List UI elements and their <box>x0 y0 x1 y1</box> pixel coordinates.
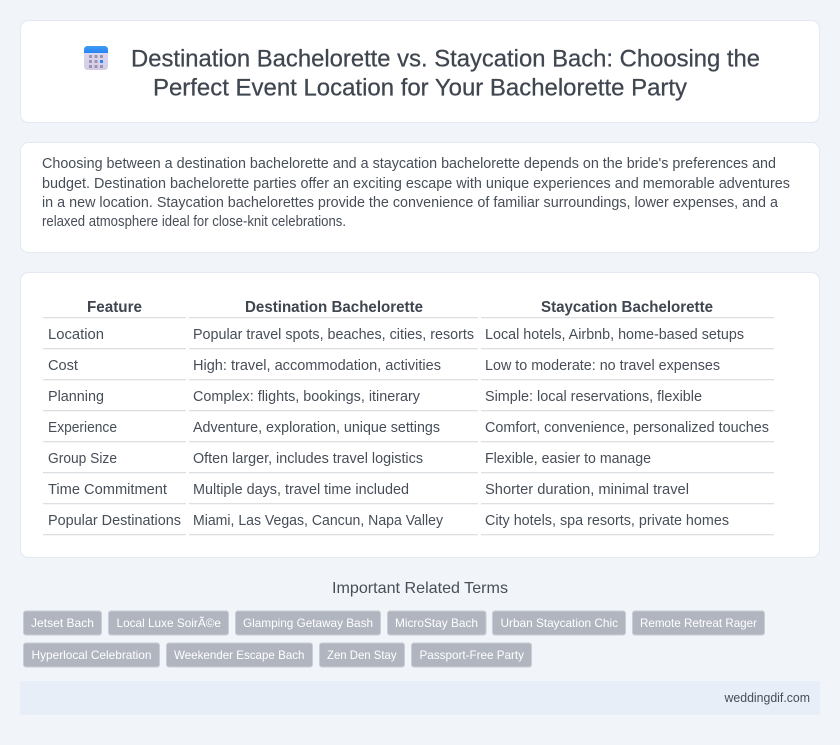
intro text: relaxed atmosphere ideal for close-knit celebrations. <box>42 214 346 230</box>
row: group size: Group Size <box>48 451 117 467</box>
intro text: in a new location. Staycation bachelorettes provide the convenience of familiar surroundings, lower expenses, and a <box>42 195 779 211</box>
row: cost: Low to moderate: no travel expenses <box>485 358 720 374</box>
table header row: Destination Bachelorette <box>245 299 423 316</box>
panel: header <box>20 20 820 122</box>
row: cost: Cost <box>48 358 78 374</box>
row: experience: Adventure, exploration, unique settings <box>193 420 440 436</box>
related term tags: Glamping Getaway Bash <box>243 616 373 630</box>
related term tags: Urban Staycation Chic <box>500 616 618 630</box>
row: time commitment: Time Commitment <box>48 482 167 498</box>
row: cost: High: travel, accommodation, activities <box>193 358 441 374</box>
row: popular destinations: Miami, Las Vegas, Cancun, Napa Valley <box>193 513 444 529</box>
row: group size: Often larger, includes travel logistics <box>193 451 423 467</box>
row: time commitment: Multiple days, travel time included <box>193 482 409 498</box>
row: time commitment <box>48 482 689 498</box>
footer bar <box>20 681 820 714</box>
panel: comparison table <box>20 272 820 558</box>
row: planning: Complex: flights, bookings, itinerary <box>193 389 421 405</box>
row: location <box>48 327 744 343</box>
table header row: Staycation Bachelorette <box>541 299 713 316</box>
related term tags <box>24 611 764 667</box>
intro text: Choosing between a destination bachelorette and a staycation bachelorette depends on the bride's preferences and <box>42 156 776 172</box>
row: experience <box>48 420 769 436</box>
row: location: Location <box>48 327 104 343</box>
related term tags: Jetset Bach <box>31 616 94 630</box>
row: planning: Simple: local reservations, flexible <box>485 389 702 405</box>
intro text: budget. Destination bachelorette parties offer an exciting escape with unique experiences and memorable adventures <box>42 176 790 192</box>
row: location: Local hotels, Airbnb, home-based setups <box>485 327 744 343</box>
row: group size <box>48 451 651 467</box>
related term tags: Weekender Escape Bach <box>174 648 304 662</box>
panel: introduction <box>20 142 820 252</box>
row: cost <box>48 358 720 374</box>
row: planning <box>48 389 702 405</box>
title: Perfect Event Location for Your Bachelorette Party <box>153 74 687 102</box>
row: popular destinations <box>48 513 729 529</box>
title <box>131 46 760 102</box>
row: time commitment: Shorter duration, minimal travel <box>485 482 689 498</box>
table header row: Feature <box>87 299 142 316</box>
footer credit: weddingdif.com <box>724 691 810 705</box>
related term tags: Local Luxe SoirÃ©e <box>116 616 221 630</box>
row: experience: Experience <box>48 420 117 436</box>
row: planning: Planning <box>48 389 104 405</box>
intro text <box>42 156 790 230</box>
icon: calendar <box>84 46 108 70</box>
related term tags: Zen Den Stay <box>327 648 396 662</box>
row: location: Popular travel spots, beaches, cities, resorts <box>193 327 474 343</box>
related term tags: Remote Retreat Rager <box>640 616 757 630</box>
row: group size: Flexible, easier to manage <box>485 451 651 467</box>
row: popular destinations: Popular Destinations <box>48 513 181 529</box>
related term tags: Passport-Free Party <box>420 648 524 662</box>
title: Destination Bachelorette vs. Staycation Bach: Choosing the <box>131 46 760 72</box>
related term tags: Hyperlocal Celebration <box>32 648 152 662</box>
related term tags: MicroStay Bach <box>395 616 478 630</box>
heading: important related terms: Important Related Terms <box>332 580 508 597</box>
row: experience: Comfort, convenience, personalized touches <box>485 420 769 436</box>
row: popular destinations: City hotels, spa resorts, private homes <box>485 513 729 529</box>
table header row <box>87 299 713 316</box>
